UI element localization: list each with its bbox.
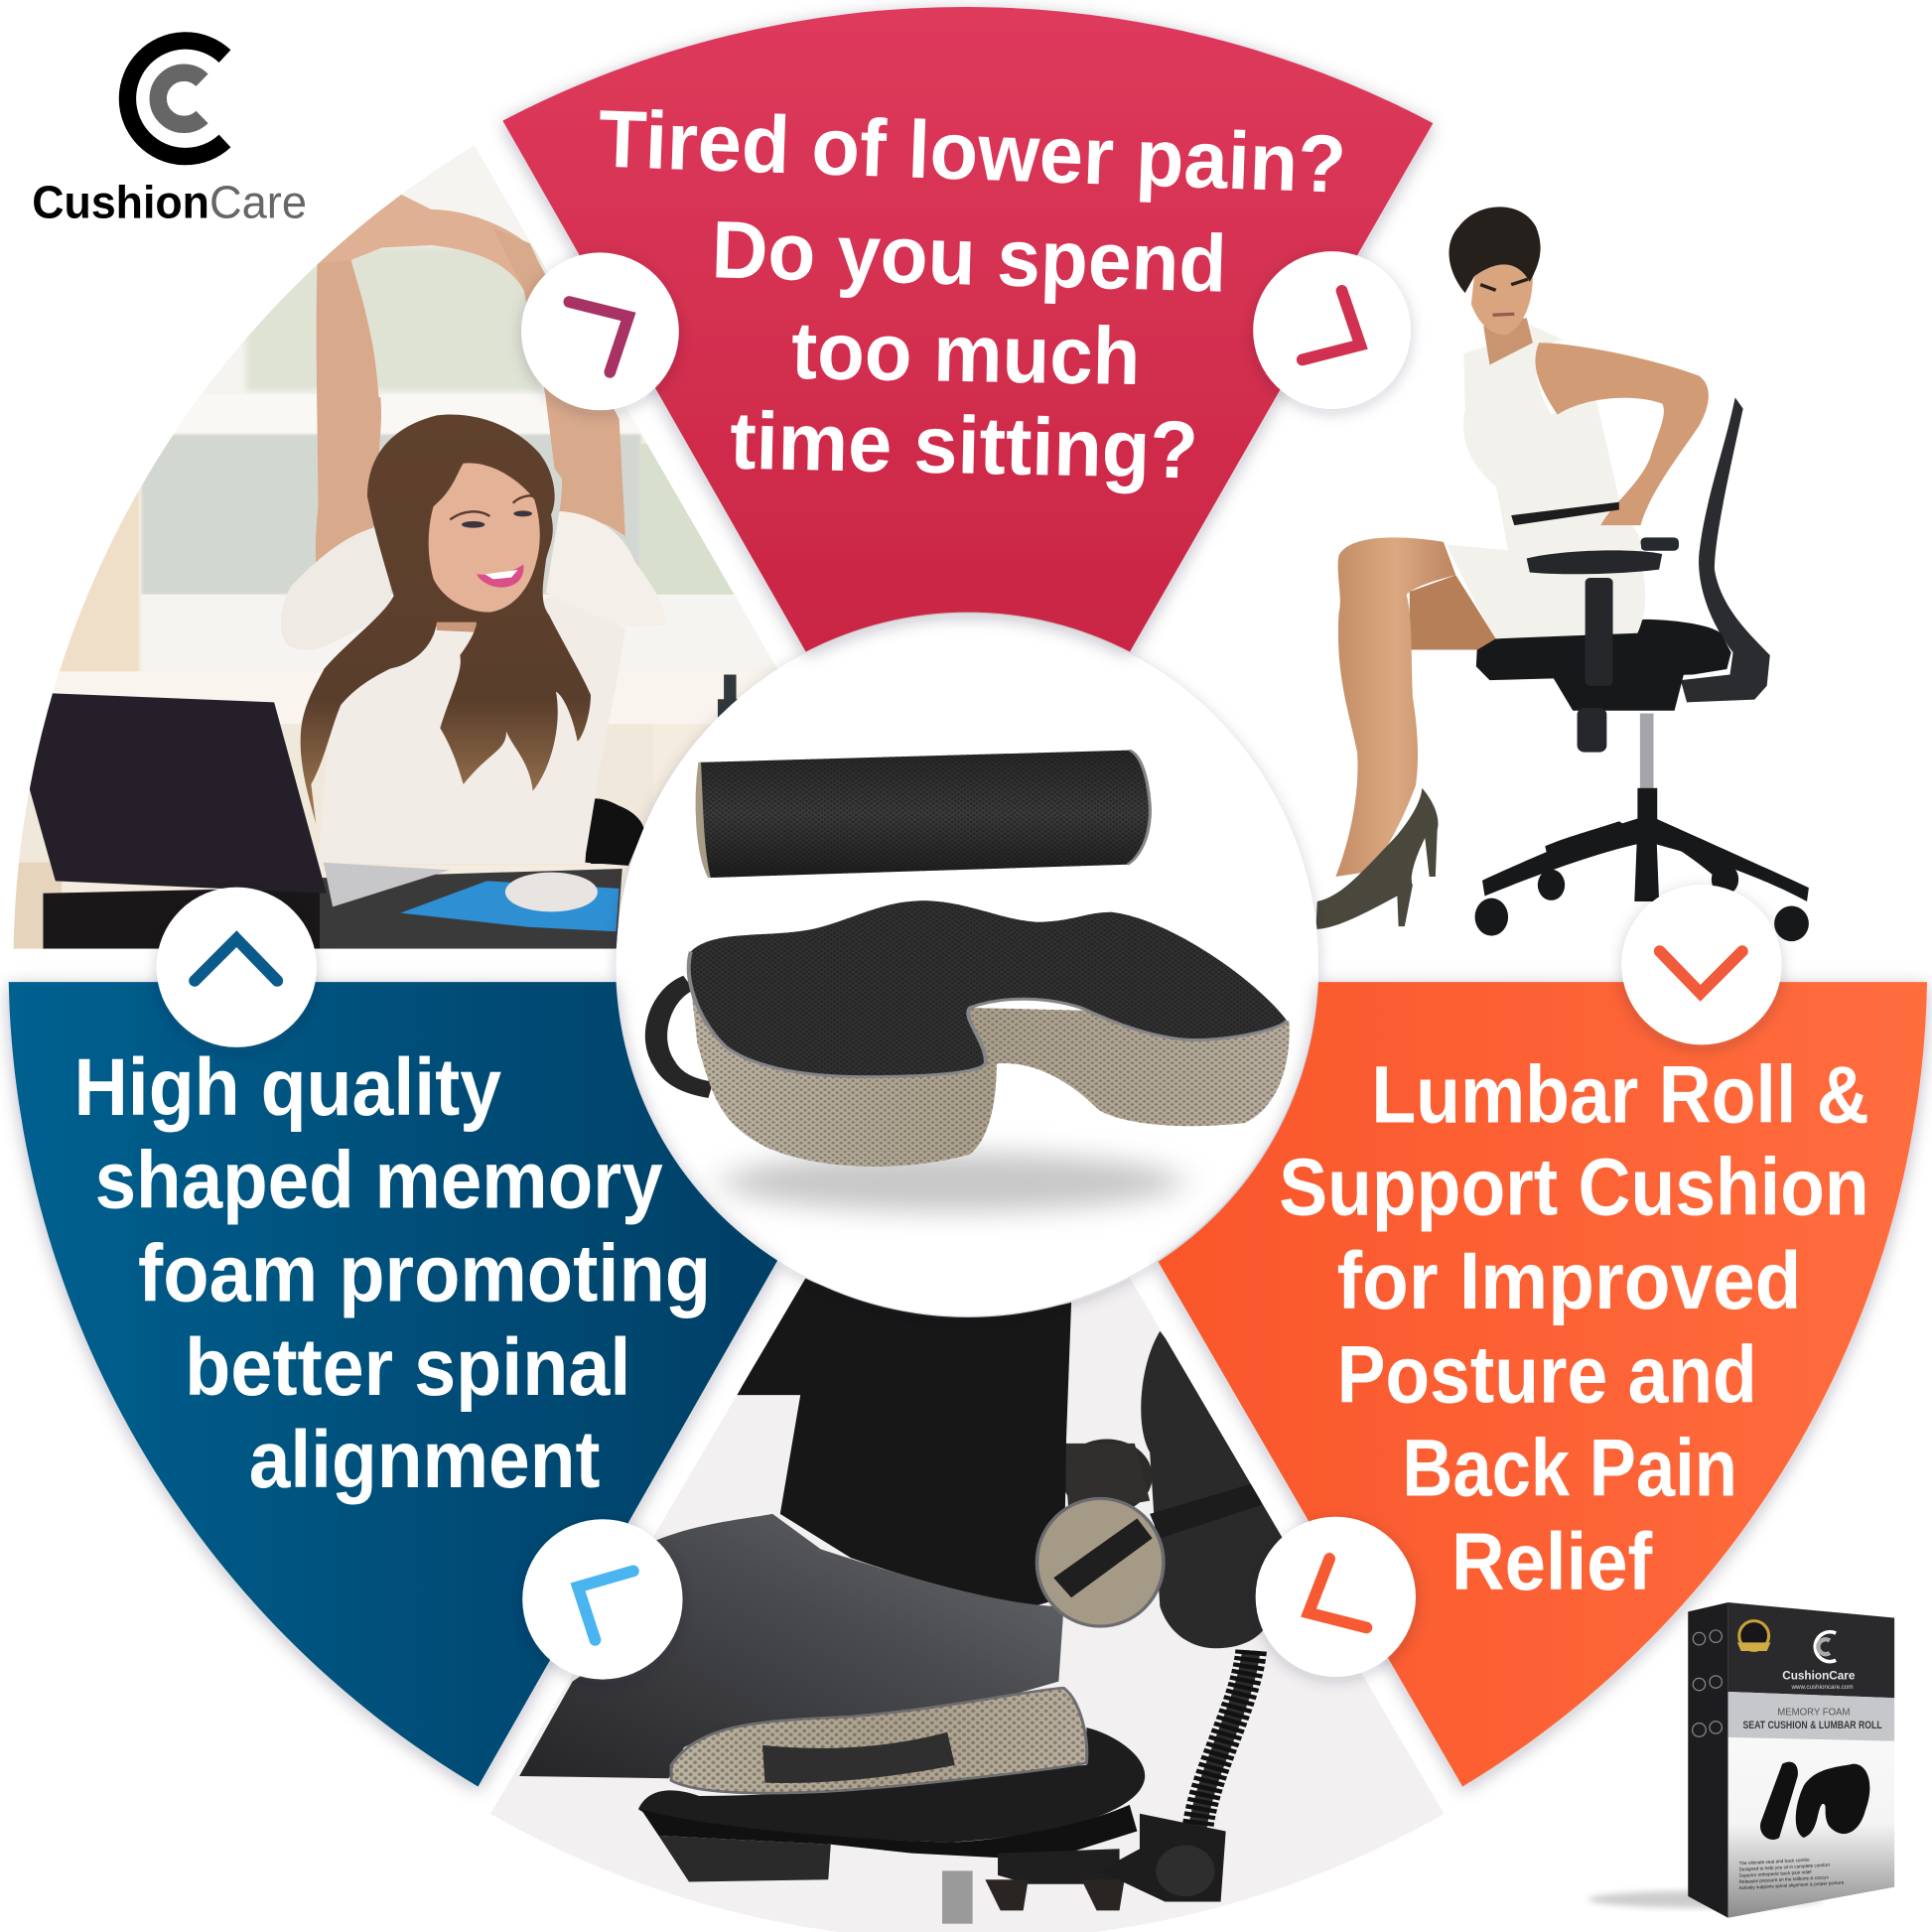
text: high quality: High quality — [73, 1042, 502, 1133]
heading: tired of lower pain: Tired of lower pain? — [597, 94, 1347, 210]
shirt — [737, 1278, 1071, 1606]
box product image — [1760, 1762, 1869, 1840]
roll body — [1065, 1440, 1152, 1507]
box title: SEAT CUSHION & LUMBAR ROLL — [1742, 1720, 1882, 1731]
box feature list: Actively supports spinal alignment & proper posture — [1739, 1880, 1845, 1890]
panel: orange benefit sector — [1159, 982, 1927, 1787]
text: support cushion: Support Cushion — [1279, 1143, 1869, 1233]
shoes — [1315, 788, 1439, 929]
text: better spinal: better spinal — [185, 1322, 630, 1413]
legs — [1410, 575, 1496, 649]
text: lumbar roll: Lumbar Roll & — [1371, 1050, 1869, 1141]
chair base — [1475, 392, 1809, 941]
text: logo wordmark: CushionCare — [32, 177, 307, 228]
text: foam promoting: foam promoting — [138, 1229, 711, 1319]
box feature list — [1739, 1858, 1845, 1890]
text: alignment: alignment — [249, 1415, 600, 1505]
logo: CushionCare — [32, 41, 307, 228]
box side icons — [1693, 1630, 1722, 1736]
icon: chevron button bottom left — [522, 1519, 683, 1680]
panel: central white circle — [617, 614, 1318, 1315]
product box — [1588, 1602, 1894, 1918]
cushion shadow — [722, 1153, 1182, 1212]
text: shaped memory: shaped memory — [95, 1135, 663, 1225]
panel: blue benefit sector — [9, 982, 777, 1787]
spring — [1198, 1650, 1251, 1827]
heading: do you spend: Do you spend — [711, 205, 1228, 310]
jeans — [519, 1514, 1063, 1778]
text: posture and: Posture and — [1337, 1329, 1757, 1420]
laptop and desk items — [28, 693, 620, 931]
heading: too much: too much — [790, 306, 1141, 402]
box feature list: Superior orthopedic back pain relief — [1739, 1869, 1812, 1878]
armrest — [1527, 550, 1662, 686]
cushion — [671, 1688, 1087, 1793]
box feature list: Releases pressure on the tailbone & coccyx — [1739, 1874, 1830, 1884]
icon: chevron button right — [1621, 885, 1782, 1044]
seat — [638, 1727, 1145, 1843]
badge — [1737, 1621, 1770, 1651]
box feature list: The ultimate seat and back combo — [1739, 1858, 1810, 1865]
woman upper body and head — [281, 397, 667, 864]
box logo — [1815, 1632, 1836, 1662]
panel: seated lumbar roll photo — [490, 1278, 1445, 1932]
neck and head — [1483, 318, 1533, 365]
box feature list: Designed to help you sit in complete comfort — [1739, 1863, 1831, 1872]
text: for improved: for Improved — [1337, 1236, 1801, 1326]
text: relief: Relief — [1451, 1517, 1653, 1607]
panel: stretching woman photo — [12, 142, 813, 955]
lumbar roll — [697, 751, 1150, 878]
central products — [656, 751, 1290, 1212]
icon: chevron button top right — [1253, 251, 1411, 409]
icon: chevron button left — [157, 888, 317, 1047]
text: back pain: Back Pain — [1402, 1424, 1737, 1514]
panel: red question sector — [502, 7, 1433, 652]
box website: www.cushioncare.com — [1791, 1684, 1854, 1691]
heading: time sitting: time sitting? — [729, 396, 1199, 495]
icon: chevron button top left — [521, 252, 679, 410]
icon: logo double C — [127, 41, 224, 157]
icon: chevron button bottom right — [1256, 1517, 1416, 1677]
box brand: CushionCare — [1782, 1670, 1856, 1683]
panel: back pain woman photo — [1316, 207, 1809, 941]
arm — [1535, 343, 1709, 525]
strap — [1150, 1481, 1261, 1538]
roll end — [1036, 1498, 1164, 1626]
backrest — [1141, 1331, 1292, 1648]
dress — [1447, 324, 1645, 638]
box subtitle: MEMORY FOAM — [1777, 1707, 1850, 1719]
seat cushion — [656, 900, 1290, 1167]
